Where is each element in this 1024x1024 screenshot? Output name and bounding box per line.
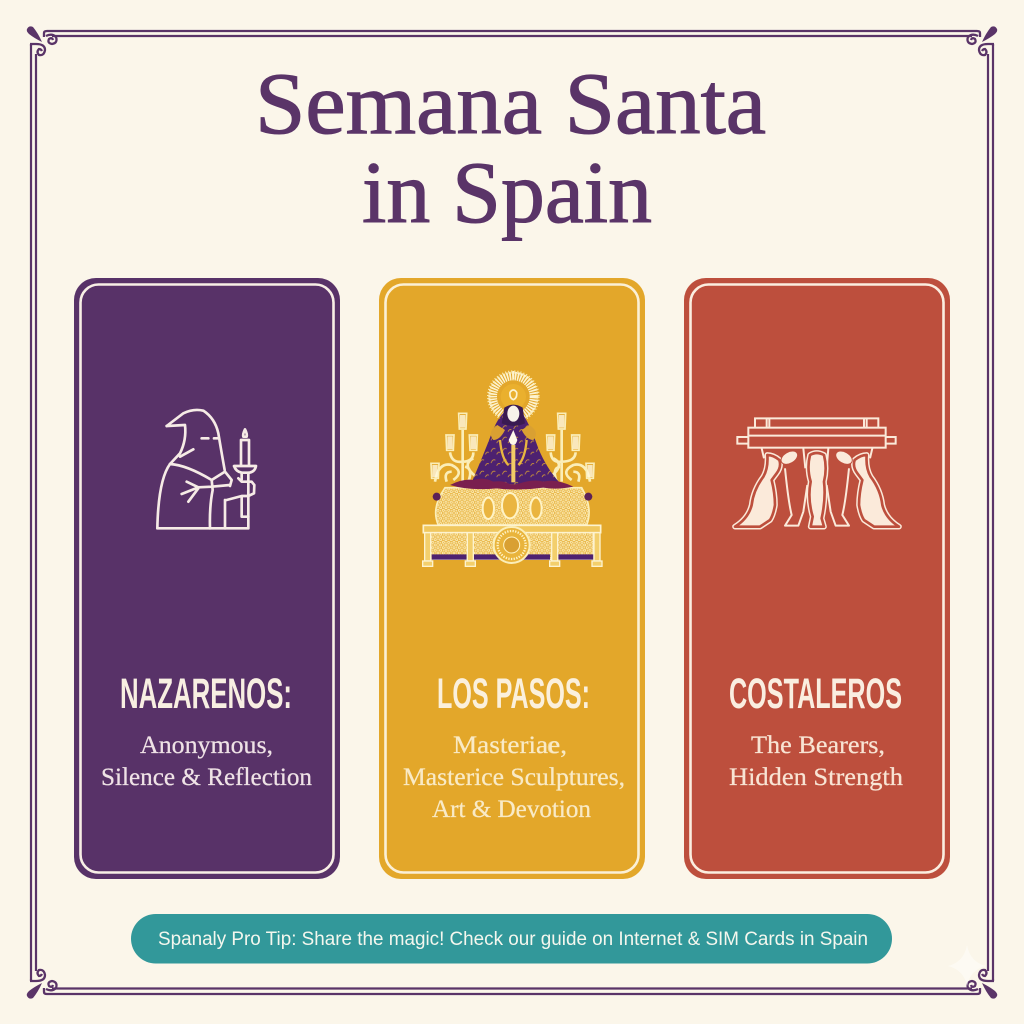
panel: Costaleros: [684, 278, 950, 879]
text: Nazarenos description: Anonymous,: [140, 732, 273, 759]
halo: [489, 371, 538, 421]
candelabra: [435, 430, 590, 482]
callout: pro tip pill: [131, 914, 892, 964]
text: Los Pasos description: Masteriae,: [453, 732, 567, 759]
text: Costaleros description: Hidden Strength: [729, 764, 904, 791]
icon: processional float with Virgin: [423, 371, 602, 566]
Virgin cloak: [473, 410, 559, 484]
legs: [423, 533, 602, 566]
icon: faint sparkle watermark: [948, 945, 986, 986]
text: Los Pasos description: Masterice Sculptures,: [403, 764, 625, 791]
rear legs and arms outlines: [762, 448, 872, 526]
hands: [779, 448, 855, 467]
title: [255, 56, 766, 242]
beam: [737, 418, 896, 448]
roses: [433, 493, 592, 501]
title: Semana Santa: [255, 56, 766, 153]
table panels: [431, 533, 593, 559]
medallions: [483, 493, 542, 519]
text: Nazarenos description: Silence & Reflection: [101, 764, 313, 791]
callout: pro tip pill: Spanaly Pro Tip: Share the magic! Check our guide on Internet & SIM Cards in Spain: [158, 929, 868, 950]
icon: bearers carrying a beam: [735, 418, 899, 527]
bearers: [735, 453, 899, 527]
heading: Los Pasos: LOS PASOS:: [437, 670, 590, 718]
heading: Nazarenos: NAZARENOS:: [120, 670, 292, 718]
text: Los Pasos description: [403, 732, 625, 823]
title: in Spain: [362, 145, 652, 242]
panel: Nazarenos: [74, 278, 340, 879]
icon: hooded nazareno with candle: [157, 410, 256, 528]
purple stripe: [432, 554, 593, 560]
central medallion: [494, 527, 530, 563]
text: Nazarenos description: [101, 732, 313, 791]
text: Los Pasos description: Art & Devotion: [432, 796, 591, 823]
upper base: [436, 488, 589, 525]
text: Los Pasos description: c: [547, 732, 558, 759]
text: Costaleros description: The Bearers,: [751, 732, 885, 759]
heading: Costaleros: COSTALEROS: [729, 670, 902, 718]
table top: [423, 525, 601, 533]
panel: Los Pasos: [379, 278, 645, 879]
text: Costaleros description: [729, 732, 904, 791]
